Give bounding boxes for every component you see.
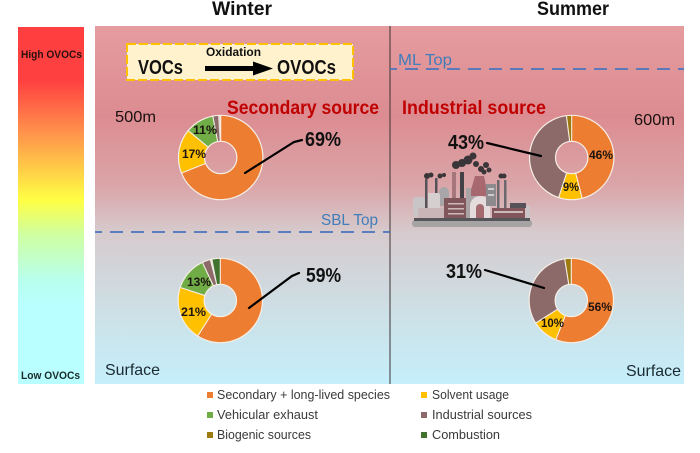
- heading: Industrial source: Industrial source: [402, 98, 546, 119]
- callout: oxidation of VOCs to OVOCs: Oxidation: [206, 45, 261, 59]
- heading: Secondary source: Secondary source: [227, 98, 379, 119]
- value label: 9%: 9%: [563, 180, 579, 194]
- donut: summer 600m: [530, 115, 614, 200]
- icon: factory: [412, 152, 532, 227]
- SBL top dashed line: [95, 231, 390, 233]
- label: ML Top: ML Top: [398, 52, 452, 69]
- divider between seasons: [389, 26, 391, 384]
- ML top dashed line: [390, 68, 684, 70]
- value label: 59%: 59%: [306, 265, 341, 287]
- value label: 10%: 10%: [541, 316, 564, 330]
- legend: Solvent usage: [432, 388, 509, 402]
- donut: winter 500m: [178, 115, 263, 200]
- buildings: [413, 197, 425, 217]
- legend: Combustion: [432, 428, 500, 442]
- colour scale bar: High OVOCs: [21, 49, 82, 61]
- value label: 31%: 31%: [446, 261, 482, 283]
- value label: 46%: 46%: [589, 148, 613, 162]
- legend: [207, 388, 532, 442]
- leader line: 43%: [487, 143, 541, 156]
- leader line: 59%: [249, 273, 299, 308]
- chimneys: [425, 179, 428, 209]
- legend: Vehicular exhaust: [217, 408, 319, 422]
- value label: 21%: 21%: [181, 305, 206, 319]
- value label: 11%: 11%: [193, 123, 217, 137]
- legend: Industrial sources: [432, 408, 532, 422]
- colour scale bar: Low OVOCs: [21, 370, 80, 382]
- callout: oxidation of VOCs to OVOCs: VOCs: [138, 57, 183, 79]
- donut: winter surface: [178, 258, 262, 343]
- callout: oxidation of VOCs to OVOCs: OVOCs: [277, 57, 336, 79]
- donut: summer surface: [529, 258, 614, 343]
- value label: 69%: 69%: [305, 129, 341, 151]
- panel: atmosphere background: [95, 26, 684, 384]
- smoke: [424, 152, 506, 179]
- leader line: 69%: [245, 140, 302, 173]
- legend: Biogenic sources: [217, 428, 311, 442]
- value label: 43%: 43%: [448, 132, 484, 154]
- value label: 13%: 13%: [187, 275, 211, 289]
- value label: 17%: 17%: [182, 147, 206, 161]
- label: 600m: 600m: [634, 112, 675, 129]
- label: Surface summer: Surface: [626, 363, 681, 380]
- label: SBL Top: SBL Top: [321, 212, 378, 229]
- legend: Secondary + long-lived species: [217, 388, 390, 402]
- leader line: 31%: [485, 270, 544, 288]
- callout: oxidation of VOCs to OVOCs: [127, 44, 353, 80]
- colour scale bar: [18, 27, 84, 384]
- value label: 56%: 56%: [588, 300, 612, 314]
- label: 500m: 500m: [115, 109, 156, 126]
- label: Surface winter: Surface: [105, 362, 160, 379]
